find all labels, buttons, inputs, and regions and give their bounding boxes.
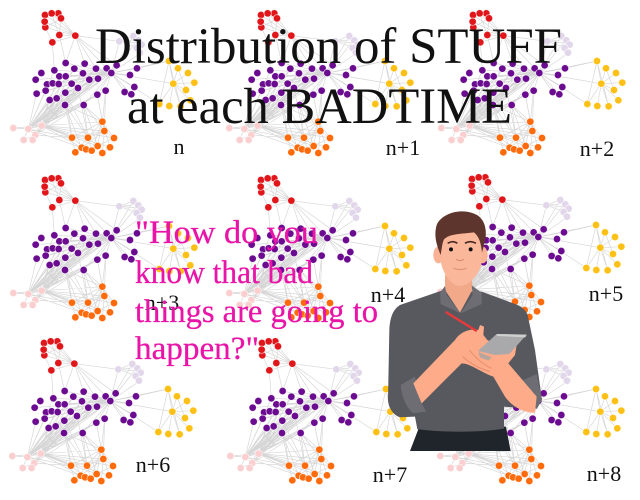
thumb bbox=[478, 352, 492, 361]
ears bbox=[433, 247, 443, 263]
neck bbox=[445, 275, 473, 313]
network: n+3 bbox=[10, 175, 198, 322]
trousers bbox=[410, 427, 511, 451]
label: n+6: n+6 bbox=[136, 452, 170, 477]
label: n: n bbox=[174, 134, 184, 159]
quote text: happen?" bbox=[135, 331, 259, 367]
face bbox=[441, 223, 482, 286]
label: n+1: n+1 bbox=[386, 135, 420, 160]
title: Distribution of STUFF bbox=[95, 19, 562, 75]
hand shadow bbox=[463, 350, 492, 372]
network: n+1 bbox=[226, 10, 414, 157]
eyes bbox=[449, 247, 453, 251]
eyebrows bbox=[448, 242, 476, 243]
illustration: man with notepad bbox=[388, 211, 542, 451]
notepad bbox=[478, 334, 527, 355]
hair bbox=[435, 211, 486, 255]
quote text bbox=[135, 215, 378, 367]
network: n+8 bbox=[437, 338, 625, 485]
network: n+2 bbox=[438, 10, 626, 157]
label: n+8: n+8 bbox=[587, 461, 621, 486]
label: n+2: n+2 bbox=[580, 136, 614, 161]
quote text: "How do you bbox=[135, 215, 318, 251]
forearms and hands bbox=[413, 325, 537, 413]
label: n+5: n+5 bbox=[589, 281, 623, 306]
quote text: things are going to bbox=[135, 294, 378, 330]
label: n+3: n+3 bbox=[145, 290, 179, 315]
shirt body bbox=[388, 291, 542, 432]
network: n+5 bbox=[437, 174, 625, 321]
title bbox=[95, 19, 562, 135]
label: n+7: n+7 bbox=[373, 462, 407, 487]
network: n bbox=[10, 10, 198, 157]
mouth and nose bbox=[453, 259, 467, 269]
collar bbox=[440, 286, 461, 313]
network: n+4 bbox=[226, 175, 414, 322]
rolled sleeves bbox=[401, 377, 426, 413]
pen bbox=[446, 312, 476, 331]
network: n+7 bbox=[227, 338, 415, 485]
label: n+4: n+4 bbox=[371, 282, 405, 307]
network: n+6 bbox=[9, 338, 197, 485]
title: at each BADTIME bbox=[127, 79, 512, 135]
quote text: know that bad bbox=[135, 255, 313, 291]
